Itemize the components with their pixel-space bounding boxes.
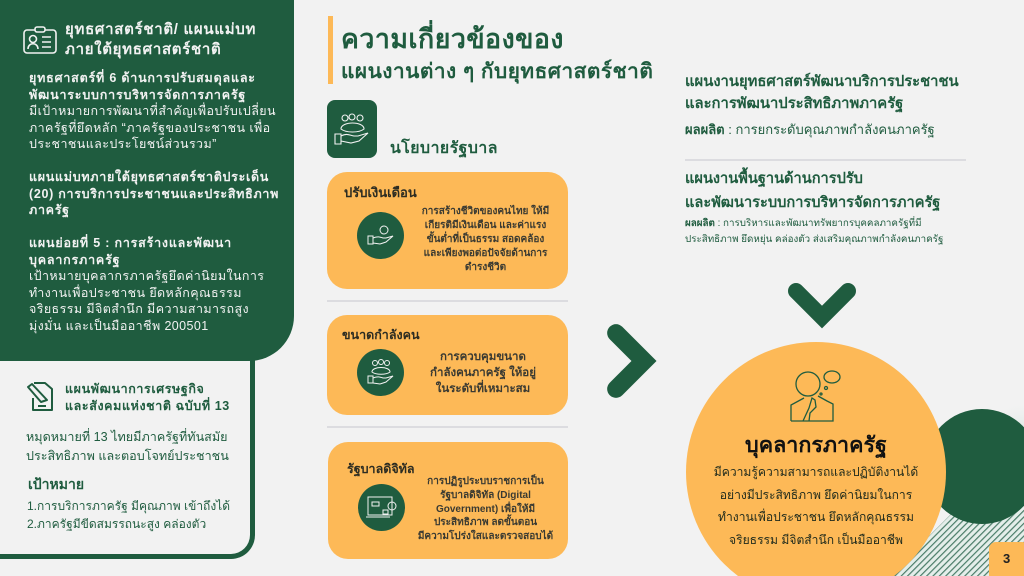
text block: goals list (27, 499, 230, 532)
personnel text: มีความรู้ความสามารถและปฏิบัติงานได้ (714, 465, 918, 479)
card text (422, 204, 549, 273)
text block: sub plan 5 (29, 234, 264, 334)
icon: id badge (23, 26, 57, 54)
text block: foundation plan output: ผลผลิต : การบริหารและพัฒนาทรัพยากรบุคคลภาครัฐที่มี (685, 218, 922, 229)
text block: strategic plan: และการพัฒนาประสิทธิภาพภาครัฐ (685, 96, 903, 112)
panel: NESDP 13 (0, 350, 255, 559)
card text: กำลังคนภาครัฐ ให้อยู่ (430, 367, 536, 379)
icon: money hand (357, 212, 404, 259)
heading: national strategy (65, 20, 256, 58)
personnel heading: บุคลากรภาครัฐ (745, 433, 887, 457)
panel: national strategy (0, 0, 294, 361)
title (341, 20, 653, 84)
icon: laptop gear (358, 484, 405, 531)
text block: foundation plan output: ประสิทธิภาพ ยึดหยุ่น คล่องตัว ส่งเสริมคุณภาพกำลังคนภาครัฐ (685, 234, 943, 245)
text block: strategy 6: ภาครัฐที่ยึดหลัก “ภาครัฐของประชาชน เพื่อ (29, 120, 271, 134)
card heading: ขนาดกำลังคน (342, 328, 419, 342)
page number: 3 (1003, 551, 1010, 566)
text block: master plan: (20) การบริการประชาชนและประสิทธิภาพ (29, 186, 279, 200)
text block: sub plan 5: ทำงานเพื่อประชาชน ยึดหลักคุณธรรม (29, 286, 242, 300)
text block: foundation plan: แผนงานพื้นฐานด้านการปรับ (685, 171, 863, 187)
personnel text: จริยธรรม มีจิตสำนึก เป็นมืออาชีพ (729, 532, 903, 546)
heading: NESDP 13 (65, 382, 230, 413)
text block: milestone 13 (26, 428, 229, 463)
card text: ดำรงชีวิต (465, 262, 506, 273)
panel: salary adjustment (327, 172, 568, 289)
text block: master plan: แผนแม่บทภายใต้ยุทธศาสตร์ชาติประเด็น (29, 170, 269, 184)
text block: foundation plan: และพัฒนาระบบการบริหารจัดการภาครัฐ (685, 194, 940, 210)
arrow: right chevron (607, 324, 656, 398)
text block: milestone 13: ประสิทธิภาพ และตอบโจทย์ประชาชน (26, 449, 229, 463)
text block: strategic plan output: ผลผลิต : การยกระดับคุณภาพกำลังคนภาครัฐ (685, 122, 935, 137)
text block: strategy 6 (29, 69, 276, 151)
text block: goals list: 2.ภาครัฐมีขีดสมรรถนะสูง คล่องตัว (27, 517, 206, 531)
panel: workforce size (327, 315, 568, 415)
text block: strategy 6: มีเป้าหมายการพัฒนาที่สำคัญเพื่อปรับเปลี่ยน (29, 104, 276, 118)
text block: sub plan 5: จริยธรรม มีจิตสำนึก มีความสามารถสูง (29, 302, 249, 316)
text block: master plan: ภาครัฐ (29, 203, 70, 217)
personnel text: อย่างมีประสิทธิภาพ ยึดค่านิยมในการ (720, 488, 912, 502)
arrow: down chevron (788, 283, 856, 328)
personnel text: ทำงานเพื่อประชาชน ยึดหลักคุณธรรม (718, 510, 914, 524)
card text (430, 351, 536, 395)
card text: ในระดับที่เหมาะสม (436, 383, 530, 395)
text block: goals list: 1.การบริการภาครัฐ มีคุณภาพ เข้าถึงได้ (27, 499, 230, 513)
card text: Government) เพื่อให้มี (436, 504, 535, 515)
card text: การสร้างชีวิตของคนไทย ให้มี (422, 206, 549, 217)
text block: strategy 6: ยุทธศาสตร์ที่ 6 ด้านการปรับสมดุลและ (29, 71, 256, 85)
text block: strategic plan (685, 72, 959, 113)
icon: thinking person (790, 370, 841, 422)
text block: strategy 6: ประชาชนและประโยชน์ส่วนรวม” (29, 137, 217, 151)
heading: goals: เป้าหมาย (28, 476, 84, 492)
panel: digital government (328, 442, 568, 559)
title: ความเกี่ยวข้องของ (341, 24, 564, 54)
decorative background: green circle and stripes (894, 409, 1024, 576)
panel: public personnel (686, 342, 946, 576)
card text: และเพียงพอต่อปัจจัยด้านการ (424, 248, 547, 259)
title: แผนงานต่าง ๆ กับยุทธศาสตร์ชาติ (341, 60, 653, 83)
heading: NESDP 13: และสังคมแห่งชาติ ฉบับที่ 13 (65, 399, 230, 413)
card heading: ปรับเงินเดือน (344, 185, 417, 200)
text block: foundation plan (685, 167, 940, 212)
icon: government policy (327, 100, 377, 158)
card text: ประสิทธิภาพ ลดขั้นตอน (434, 517, 537, 528)
text block: strategy 6: พัฒนาระบบการบริหารจัดการภาครัฐ (29, 88, 246, 102)
icon: people hand (357, 349, 404, 396)
page number (989, 542, 1024, 576)
text block: master plan (29, 169, 279, 218)
icon: document pen (27, 382, 53, 411)
text block: sub plan 5: มุ่งมั่น และเป็นมืออาชีพ 200501 (29, 318, 209, 332)
heading: NESDP 13: แผนพัฒนาการเศรษฐกิจ (65, 382, 204, 396)
heading: government policy: นโยบายรัฐบาล (390, 140, 498, 157)
text block: sub plan 5: เป้าหมายบุคลากรภาครัฐยึดค่านิยมในการ (29, 269, 264, 283)
text block: strategic plan: แผนงานยุทธศาสตร์พัฒนาบริการประชาชน (685, 74, 959, 90)
card text: รัฐบาลดิจิทัล (Digital (440, 490, 531, 501)
heading: national strategy: ภายใต้ยุทธศาสตร์ชาติ (65, 41, 221, 58)
card heading: รัฐบาลดิจิทัล (347, 462, 415, 476)
text block: milestone 13: หมุดหมายที่ 13 ไทยมีภาครัฐที่ทันสมัย (26, 430, 228, 444)
card text: มีความโปร่งใสและตรวจสอบได้ (418, 531, 553, 542)
card text: การปฏิรูประบบราชการเป็น (427, 476, 544, 487)
card text: เกียรติมีเงินเดือน และค่าแรง (425, 220, 546, 231)
card text: ขั้นต่ำที่เป็นธรรม สอดคล้อง (427, 234, 544, 245)
personnel text (714, 465, 918, 546)
text block: sub plan 5: แผนย่อยที่ 5 : การสร้างและพัฒนา (29, 236, 232, 250)
heading: national strategy: ยุทธศาสตร์ชาติ/ แผนแม่บท (65, 21, 256, 38)
text block: foundation plan output (685, 216, 943, 245)
card text: การควบคุมขนาด (440, 351, 526, 363)
title accent bar (328, 16, 333, 84)
card text (418, 474, 553, 542)
text block: sub plan 5: บุคลากรภาครัฐ (29, 252, 120, 266)
